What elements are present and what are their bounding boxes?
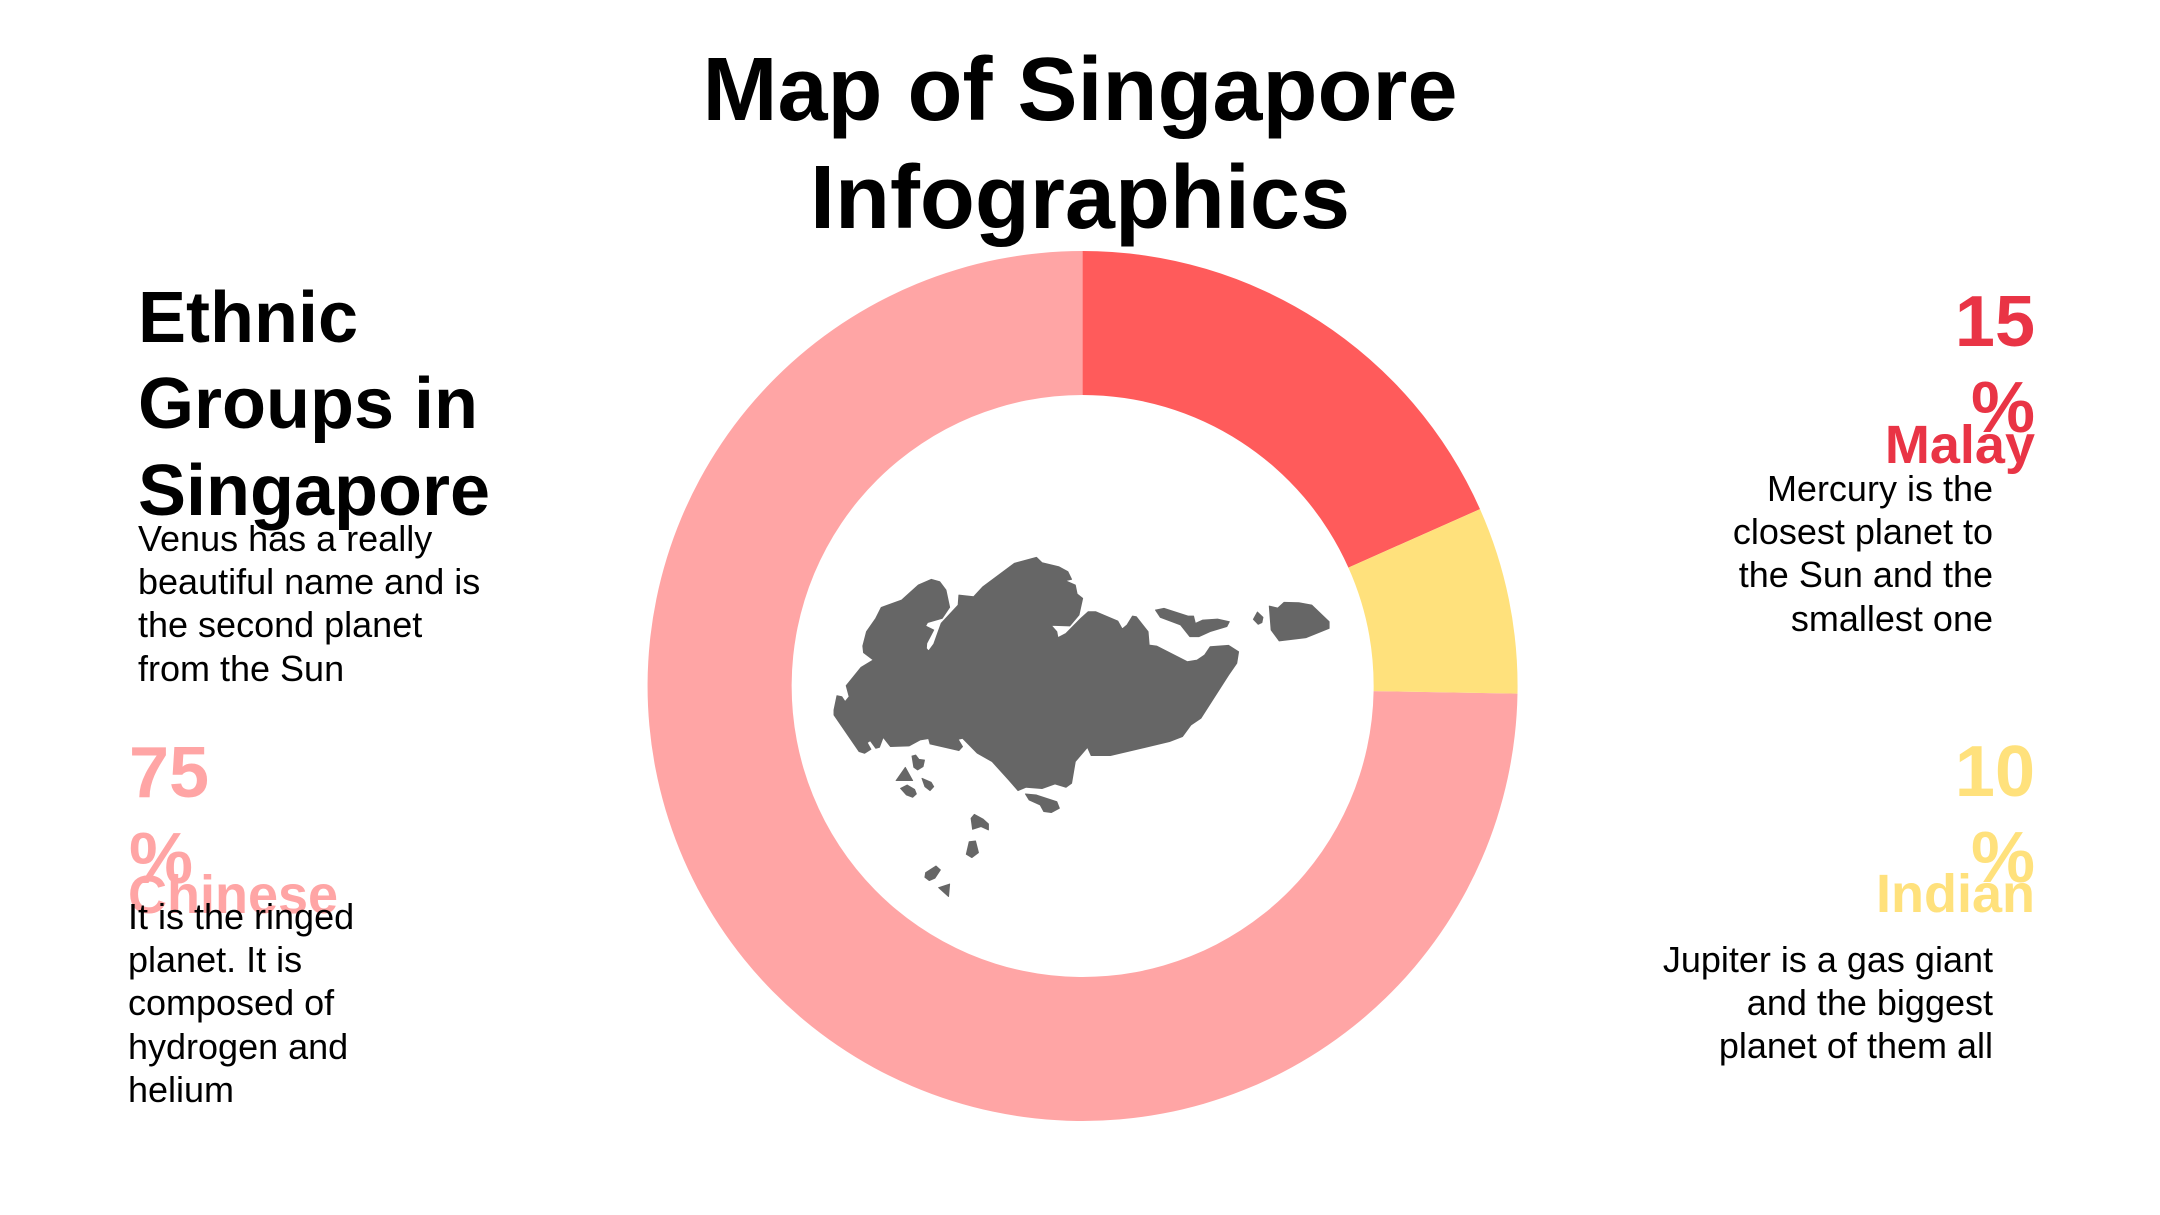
percentage: 15%: % (1971, 368, 2035, 448)
label: Malay: Malay (1885, 415, 2035, 475)
text block: Mercury: the Sun and the (1739, 554, 1993, 595)
text block: Venus: Venus has a really (138, 518, 432, 559)
heading (138, 278, 490, 531)
panel: ethnic groups intro (138, 278, 490, 689)
label: Chinese: Chinese (128, 865, 338, 925)
text block: Mercury (1733, 468, 1993, 639)
label: Indian: Indian (1876, 864, 2035, 924)
percentage: 75% (129, 733, 209, 899)
donut segment: Malay (1083, 251, 1480, 568)
text block: Mercury: smallest one (1791, 598, 1993, 639)
panel: Indian stat (1663, 732, 2035, 1066)
text block: Saturn (128, 896, 354, 1110)
heading: Singapore (138, 451, 490, 531)
percentage: 75%: % (129, 819, 193, 899)
text block: Jupiter: Jupiter is a gas giant (1663, 939, 1993, 980)
text block: Mercury: closest planet to (1733, 511, 1993, 552)
icon: map of Singapore (834, 557, 1329, 897)
donut segment: Indian (1348, 509, 1518, 694)
title (702, 40, 1458, 248)
percentage: 10% (1955, 732, 2035, 898)
panel: Malay stat (1733, 282, 2035, 639)
title: Infographics (810, 148, 1350, 248)
text block: Jupiter: and the biggest (1747, 982, 1993, 1023)
percentage: 10%: 10 (1955, 732, 2035, 812)
text block: Venus: from the Sun (138, 648, 344, 689)
text block: Saturn: It is the ringed (128, 896, 354, 937)
text block: Saturn: planet. It is (128, 939, 302, 980)
percentage: 15% (1955, 282, 2035, 448)
percentage: 10%: % (1971, 818, 2035, 898)
text block: Saturn: helium (128, 1069, 234, 1110)
percentage: 15%: 15 (1955, 282, 2035, 362)
title: Map of Singapore (702, 40, 1458, 140)
text block: Venus: the second planet (138, 604, 422, 645)
text block: Venus (138, 518, 480, 689)
percentage: 75%: 75 (129, 733, 209, 813)
text block: Jupiter (1663, 939, 1993, 1066)
heading: Ethnic (138, 278, 358, 358)
panel: Chinese stat (128, 733, 354, 1110)
heading: Groups in (138, 364, 478, 444)
text block: Saturn: composed of (128, 982, 334, 1023)
text block: Saturn: hydrogen and (128, 1026, 348, 1067)
text block: Mercury: Mercury is the (1767, 468, 1993, 509)
donut segment: Chinese (648, 251, 1518, 1121)
text block: Jupiter: planet of them all (1719, 1025, 1993, 1066)
text block: Venus: beautiful name and is (138, 561, 480, 602)
